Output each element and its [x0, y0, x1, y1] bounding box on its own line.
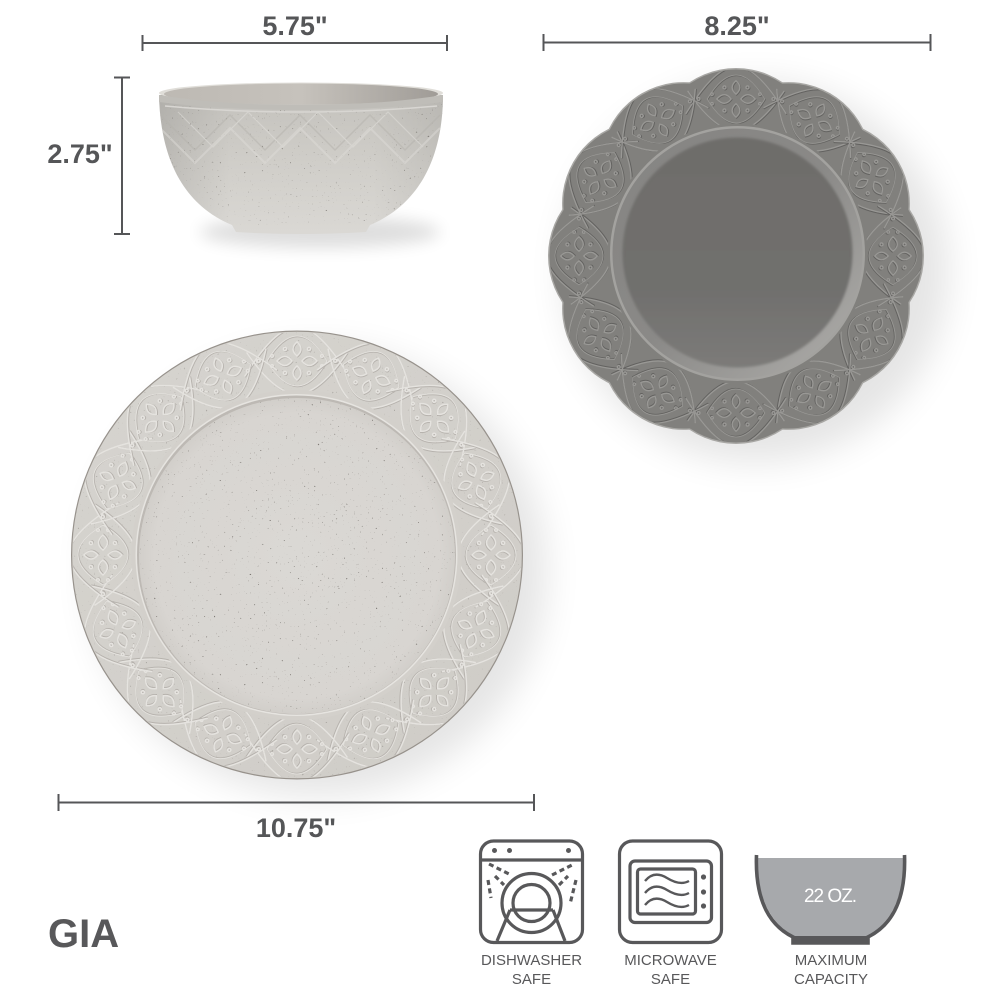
icon: bowl capacity: 22 OZ.	[804, 886, 856, 907]
label: microwave safe: SAFE	[651, 971, 690, 988]
bowl opening	[159, 82, 443, 104]
label: maximum capacity: CAPACITY	[794, 971, 868, 988]
embossed medallion border	[66, 324, 528, 786]
dimension: small plate width 8.25: 8.25"	[704, 11, 770, 41]
icon: microwave safe	[620, 841, 722, 942]
bowl embossed band	[160, 112, 440, 163]
dimension: bowl width 5.75	[142, 11, 447, 51]
label: microwave safe: MICROWAVE	[624, 952, 717, 969]
bowl	[159, 82, 443, 234]
plate well	[132, 390, 462, 720]
shadow: dark plate	[564, 82, 948, 462]
dimension: bowl height 2.75	[47, 78, 130, 234]
label: dishwasher safe: SAFE	[512, 971, 551, 988]
large cream plate	[66, 324, 528, 786]
dark grey scalloped plate	[548, 68, 924, 444]
bowl side shading	[159, 95, 443, 225]
dimension: bowl width 5.75: 5.75"	[262, 11, 328, 41]
dimension: bowl height 2.75: 2.75"	[47, 139, 113, 169]
dimension: dinner plate width 10.75: 10.75"	[256, 813, 336, 843]
shadow: large plate	[90, 348, 546, 796]
label: dishwasher safe: DISHWASHER	[481, 952, 582, 969]
embossed dark medallion border	[546, 66, 926, 446]
dimension: dinner plate width 10.75	[58, 794, 534, 843]
icon: bowl capacity	[756, 855, 905, 943]
bowl body	[159, 95, 443, 234]
dark plate well	[608, 124, 868, 384]
bowl speckle	[159, 95, 443, 225]
shadow: bowl	[200, 216, 440, 248]
dimension: small plate width 8.25	[544, 11, 930, 51]
collection name: GIA	[48, 912, 119, 956]
icon: dishwasher safe	[480, 841, 582, 942]
label: maximum capacity: MAXIMUM	[795, 952, 867, 969]
